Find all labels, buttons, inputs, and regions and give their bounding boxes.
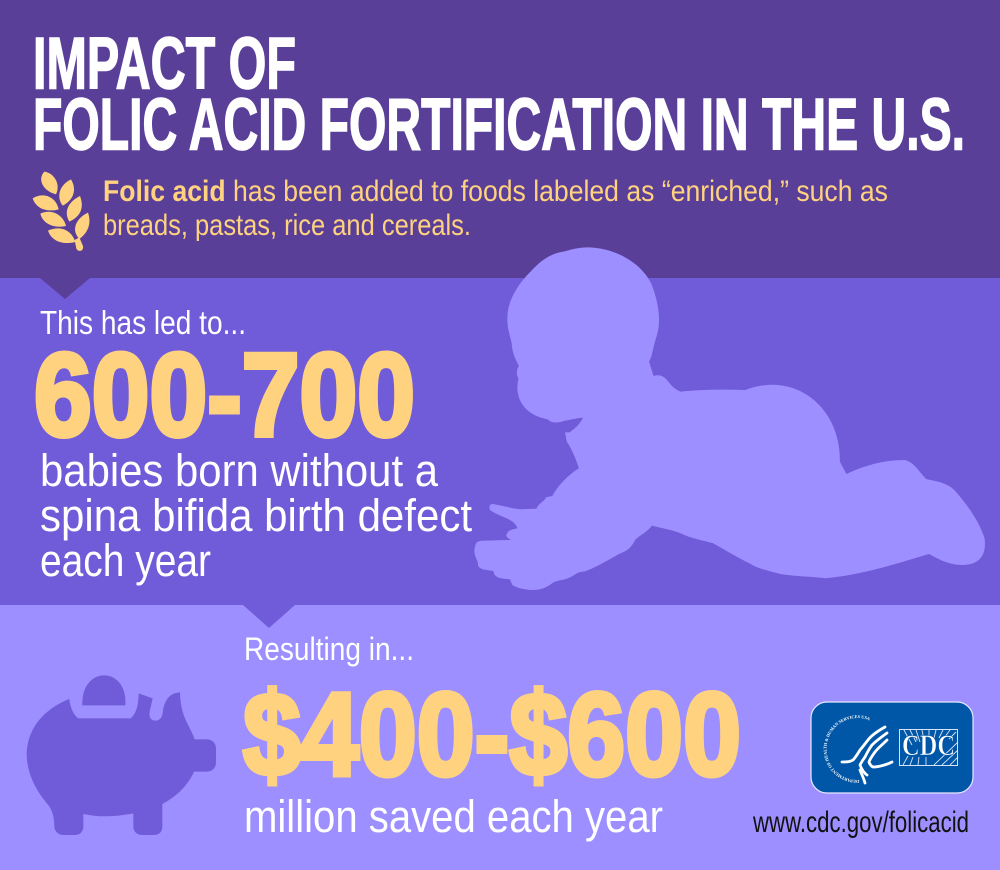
text: resulting in: Resulting in... (244, 631, 414, 667)
text block: babies born: each year (40, 535, 211, 586)
big number: savings: $400-$600 (243, 669, 741, 801)
panel: spina bifida band (0, 278, 1000, 605)
arrow: header pointer (40, 278, 90, 299)
arrow: middle band pointer (243, 605, 295, 628)
logo background (811, 702, 973, 793)
text block: folic acid intro (103, 175, 888, 242)
text block: babies born: babies born without a (40, 445, 439, 496)
icon: baby silhouette (474, 247, 985, 590)
logo: CDC box: CDC (902, 729, 955, 762)
text block: babies born: spina bifida birth defect (40, 490, 472, 541)
panel: savings band (0, 605, 1000, 870)
text block: folic acid intro: Folic acid has been added to foods labeled as “enriched,” such as (103, 175, 888, 208)
icon: wheat (33, 172, 89, 251)
panel: header band (0, 0, 1000, 278)
icon: piggy bank (27, 675, 216, 835)
title: IMPACT OF (33, 24, 296, 104)
text: this has led to: This has led to... (40, 304, 246, 341)
logo: HHS eagle (842, 727, 892, 783)
text: million saved: million saved each year (244, 791, 663, 842)
title (33, 24, 965, 166)
logo: HHS and CDC (810, 701, 974, 794)
big number: 600-700: 600-700 (34, 330, 415, 462)
text block: babies born (40, 445, 472, 586)
text block: folic acid intro: breads, pastas, rice and cereals. (103, 209, 471, 242)
logo: HHS seal text: DEPARTMENT OF HEALTH & HUMAN SERVICES USA (824, 715, 870, 783)
